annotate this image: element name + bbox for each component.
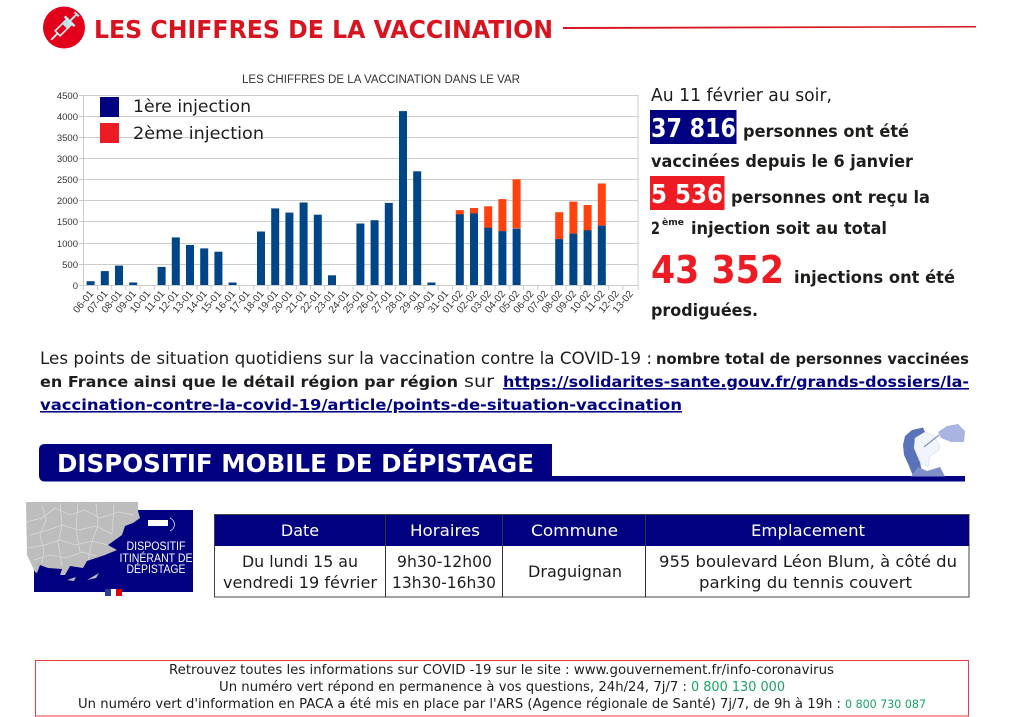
first injection bars xyxy=(87,111,606,285)
key figures text block: vaccinées depuis le 6 janvier xyxy=(651,152,914,171)
figure: 5 536 second injection: 5 536 xyxy=(651,180,723,210)
title: LES CHIFFRES DE LA VACCINATION xyxy=(94,15,553,44)
x axis date labels: 07-01 xyxy=(86,289,111,316)
chart title: LES CHIFFRES DE LA VACCINATION DANS LE VAR xyxy=(242,74,520,86)
x axis date labels: 08-01 xyxy=(100,289,125,316)
x axis date labels: 21-01 xyxy=(284,289,310,316)
bar chart: vaccinations in the Var xyxy=(57,74,638,316)
footer information box: Un numéro vert d'information en PACA a été mis en place par l'ARS (Agence régionale de Santé) 7j/7, de 9h à 19h : xyxy=(78,697,841,712)
x axis date labels: 05-02 xyxy=(497,289,523,316)
key figures text block: injection soit au total xyxy=(691,219,887,238)
x axis date labels: 16-01 xyxy=(213,289,239,316)
x axis date labels: 08-02 xyxy=(540,289,565,316)
paragraph: daily situation reports: en France ainsi que le détail région par région xyxy=(40,373,458,391)
figure: 37 816 vaccinated: 37 816 xyxy=(651,114,736,144)
x axis date labels: 27-01 xyxy=(370,289,395,316)
table header: Commune xyxy=(531,521,618,540)
figure: 43 352 total injections: 43 352 xyxy=(651,248,784,292)
x axis date labels: 12-02 xyxy=(597,289,622,316)
table row: 9h30-12h00 xyxy=(397,552,492,571)
key figures text block: injections ont été xyxy=(794,268,955,287)
map panel: itinerant testing: ITINÉRANT DE xyxy=(120,550,192,565)
table header: Horaires xyxy=(410,521,480,540)
table header: Emplacement xyxy=(751,521,865,540)
key figures text block: prodiguées. xyxy=(651,301,758,320)
title rule xyxy=(563,26,976,29)
key figures text block: personnes ont été xyxy=(743,122,909,141)
footer information box: 0 800 730 087 xyxy=(845,697,926,711)
footer information box: 0 800 130 000 xyxy=(691,680,785,695)
paragraph: daily situation reports: vaccination-contre-la-covid-19/article/points-de-situation-vaccination xyxy=(40,396,682,414)
schedule table xyxy=(214,514,969,597)
x axis date labels: 11-02 xyxy=(583,289,608,315)
icon: French flag xyxy=(105,589,122,596)
y axis labels: 3500 xyxy=(57,133,78,144)
x axis date labels: 07-02 xyxy=(526,289,551,316)
table row: 955 boulevard Léon Blum, à côté du xyxy=(659,552,957,571)
x axis date labels: 29-01 xyxy=(398,289,423,316)
y axis labels: 4500 xyxy=(57,91,78,102)
paragraph: daily situation reports: sur xyxy=(464,372,494,391)
x axis date labels: 18-01 xyxy=(242,289,267,316)
table row: 13h30-16h30 xyxy=(392,573,496,592)
key figures text block: personnes ont reçu la xyxy=(731,188,930,207)
y axis labels xyxy=(57,91,78,292)
x axis date labels: 14-01 xyxy=(185,289,210,316)
y axis labels: 0 xyxy=(73,281,78,292)
footer information box: Retrouvez toutes les informations sur COVID -19 sur le site : www.gouvernement.fr/info-coronavirus xyxy=(169,663,834,678)
table row: vendredi 19 février xyxy=(223,573,377,592)
x axis date labels: 09-01 xyxy=(114,289,139,316)
x axis date labels: 13-02 xyxy=(611,289,636,316)
x axis date labels: 20-01 xyxy=(270,289,295,316)
table header xyxy=(215,515,969,546)
x axis date labels: 06-01 xyxy=(71,289,97,316)
y axis labels: 500 xyxy=(62,260,78,271)
x axis date labels: 06-02 xyxy=(512,289,537,316)
x axis date labels: 26-01 xyxy=(355,289,381,316)
icon: syringe in red circle xyxy=(43,6,85,48)
footer information box xyxy=(36,660,968,716)
x axis date labels: 17-01 xyxy=(228,289,253,316)
x axis date labels: 10-01 xyxy=(128,289,153,316)
x axis date labels: 31-01 xyxy=(426,289,452,316)
x axis date labels: 11-01 xyxy=(143,289,168,315)
second injection bars xyxy=(456,179,606,239)
x axis date labels: 15-01 xyxy=(199,289,224,316)
x axis date labels: 30-01 xyxy=(412,289,437,316)
y axis labels: 3000 xyxy=(57,154,78,165)
x axis date labels: 19-01 xyxy=(256,289,281,316)
map panel: itinerant testing: DISPOSITIF xyxy=(126,539,186,553)
chart legend: 2ème injection xyxy=(133,124,264,144)
key figures text block: ème xyxy=(662,217,684,228)
y axis labels: 1000 xyxy=(57,239,78,250)
x axis date labels: 22-01 xyxy=(299,289,324,316)
x axis date labels: 23-01 xyxy=(313,289,338,316)
map: Var coastline xyxy=(26,502,140,581)
y axis labels: 2000 xyxy=(57,196,78,207)
map panel: itinerant testing: DÉPISTAGE xyxy=(126,561,186,576)
table row: Draguignan xyxy=(528,562,622,581)
section heading: mobile testing xyxy=(39,444,965,482)
x axis date labels: 12-01 xyxy=(157,289,182,316)
footer information box: Un numéro vert répond en permanence à vos questions, 24h/24, 7j/7 : xyxy=(219,680,687,695)
paragraph: daily situation reports: nombre total de personnes vaccinées xyxy=(656,350,969,368)
x axis date labels: 24-01 xyxy=(327,289,352,316)
map callout box xyxy=(148,518,174,531)
icon: nasal swab test xyxy=(903,424,965,476)
key figures text block: 2 xyxy=(651,219,660,238)
x axis date labels: 02-02 xyxy=(455,289,480,316)
paragraph: daily situation reports xyxy=(40,349,969,414)
table row: Du lundi 15 au xyxy=(242,552,358,571)
key figures text block xyxy=(650,85,955,320)
paragraph: daily situation reports: https://solidarites-sante.gouv.fr/grands-dossiers/la- xyxy=(503,373,969,391)
paragraph: daily situation reports: Les points de situation quotidiens sur la vaccination contre la COVID-19 : xyxy=(40,349,652,368)
table row xyxy=(223,552,957,592)
x axis date labels: 09-02 xyxy=(554,289,579,316)
map panel: itinerant testing xyxy=(26,502,193,596)
x axis date labels: 10-02 xyxy=(568,289,594,316)
x axis date labels: 01-02 xyxy=(441,289,466,316)
y axis labels: 1500 xyxy=(57,217,78,228)
chart legend: 1ère injection xyxy=(133,97,251,117)
section heading: mobile testing: DISPOSITIF MOBILE DE DÉPISTAGE xyxy=(57,449,534,478)
key figures text block: Au 11 février au soir, xyxy=(651,85,832,106)
y axis labels: 2500 xyxy=(57,175,78,186)
x axis date labels: 03-02 xyxy=(469,289,494,316)
x axis date labels: 13-01 xyxy=(171,289,196,316)
x axis date labels: 04-02 xyxy=(483,289,508,316)
y axis labels: 4000 xyxy=(57,112,78,123)
x axis date labels: 25-01 xyxy=(341,289,366,316)
table header: Date xyxy=(281,521,319,540)
table row: parking du tennis couvert xyxy=(699,573,912,592)
x axis date labels: 28-01 xyxy=(384,289,409,316)
x axis date labels xyxy=(71,289,636,316)
chart legend xyxy=(100,97,264,144)
